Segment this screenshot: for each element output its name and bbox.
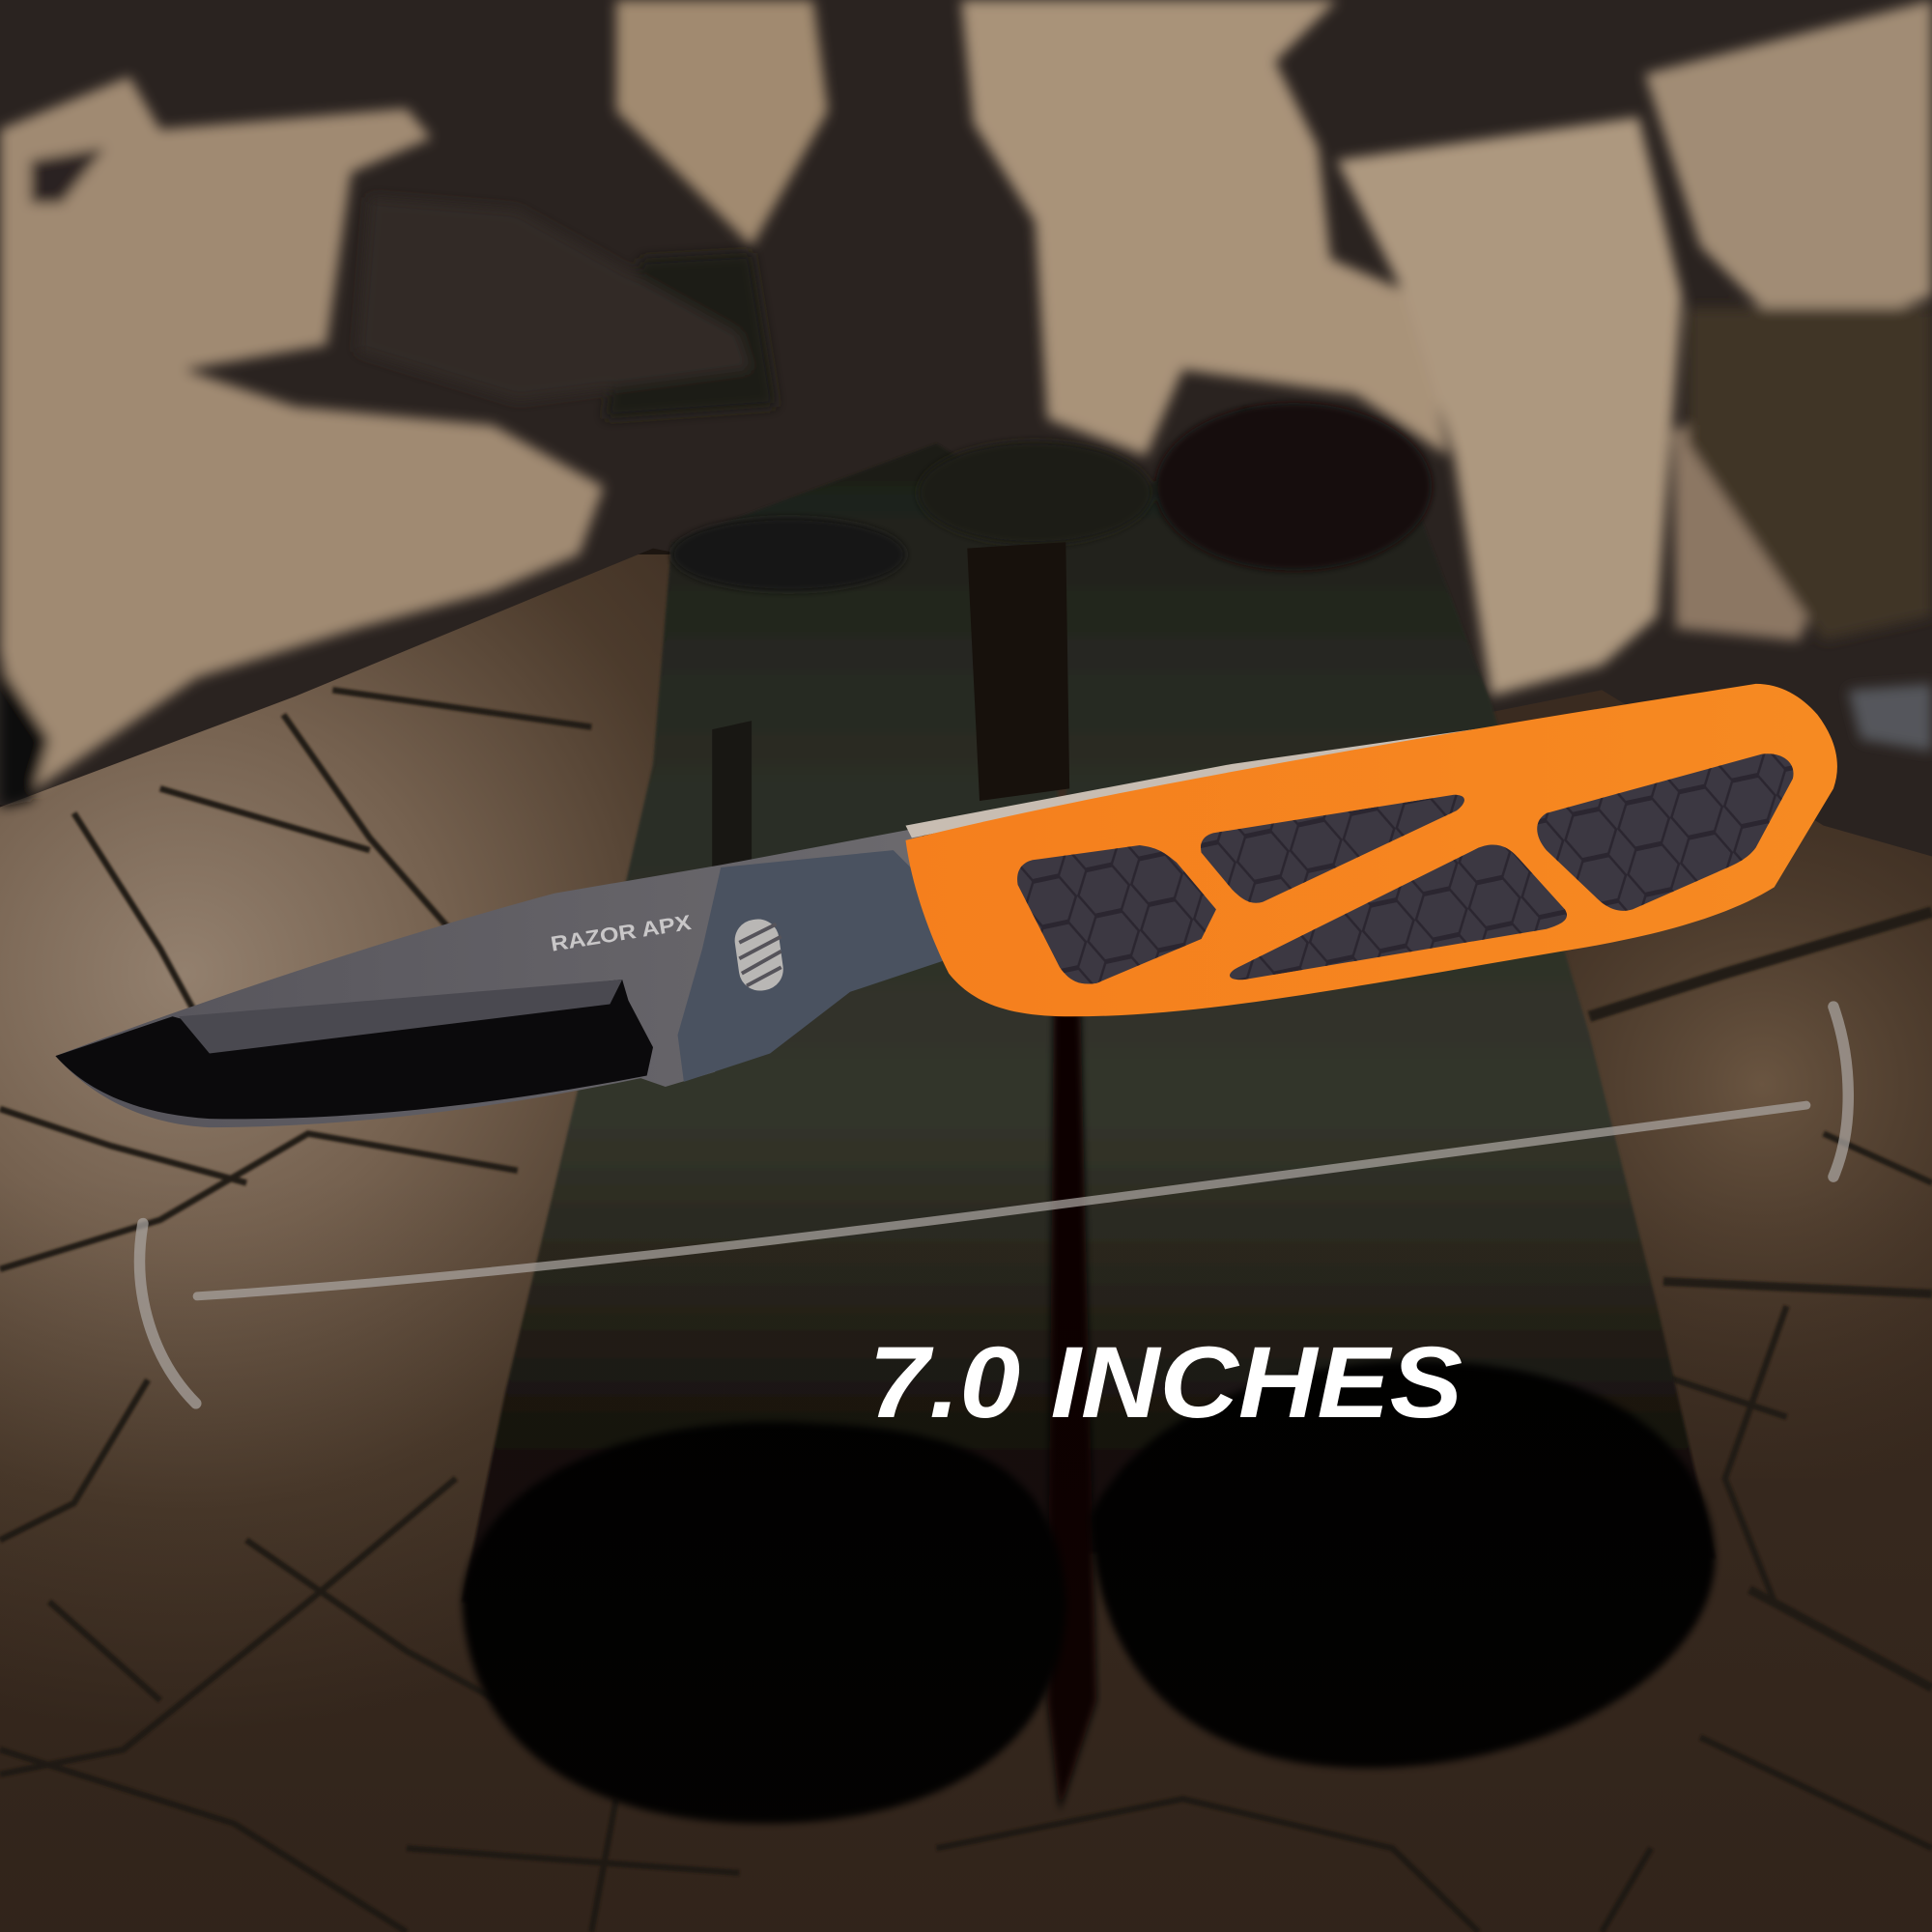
measurement bracket and line: [140, 1007, 1848, 1404]
photo background: camouflage fabric: [0, 0, 1932, 856]
spine highlight: [906, 690, 1756, 838]
binocular centre gap: [1047, 1010, 1096, 1811]
measurement label: 7.0 INCHES: [868, 1326, 1463, 1439]
binocular left barrel: [462, 443, 1069, 1602]
handle grip inserts: [1017, 753, 1794, 983]
knife blade: [55, 828, 936, 1127]
binocular focus bridge: [967, 542, 1069, 801]
binocular left lens: [462, 1422, 1065, 1824]
bottom darkening: [0, 1171, 1932, 1932]
binoculars: [462, 403, 1716, 1824]
binocular right barrel: [1060, 407, 1716, 1559]
brand mark: RAZOR APX: [549, 910, 694, 956]
blade black edge: [55, 980, 653, 1119]
binocular label panel: [712, 721, 752, 875]
photo background: weathered wood: [0, 554, 1932, 1932]
binocular right lens: [1091, 1361, 1716, 1768]
thumb stud: [732, 917, 786, 993]
knife bolster: [678, 850, 943, 1082]
knife: [55, 684, 1837, 1127]
binocular eyepieces: [671, 403, 1432, 591]
orange handle: [906, 684, 1837, 1016]
